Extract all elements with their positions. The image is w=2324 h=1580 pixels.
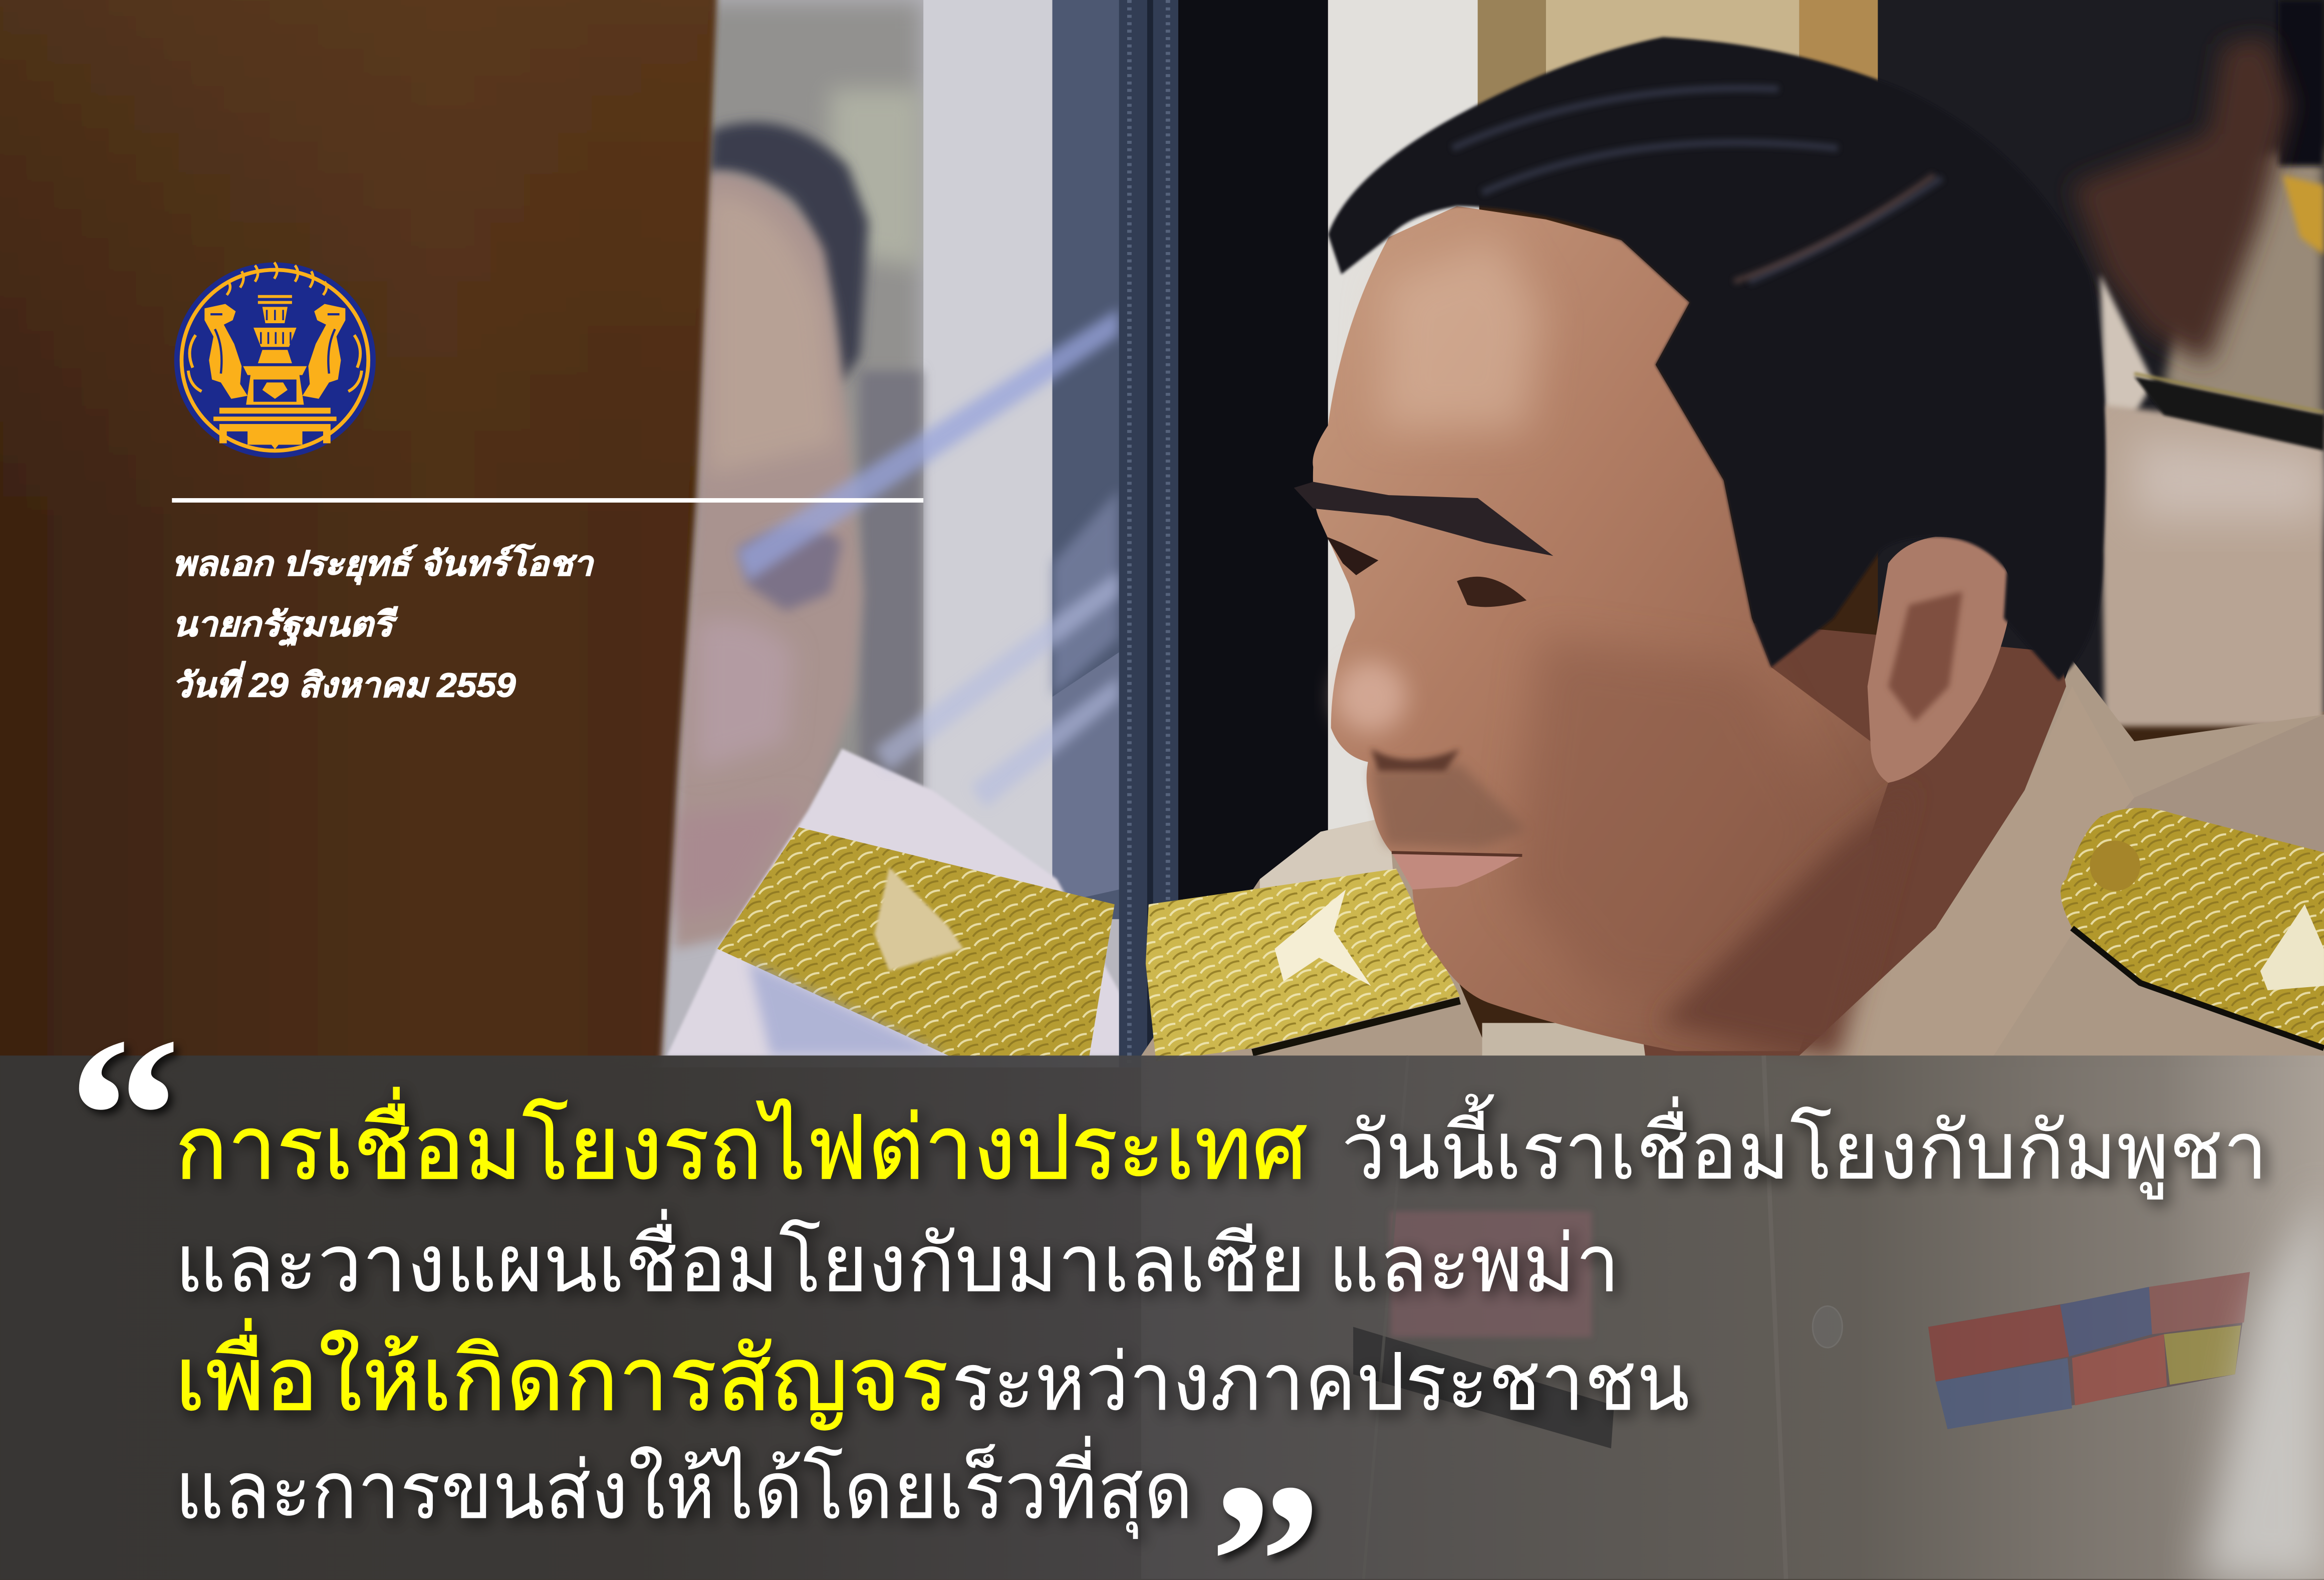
panel: background officer <box>2072 0 2324 727</box>
text: speaker credit <box>172 544 594 704</box>
divider line <box>172 498 923 503</box>
pink rank badge <box>1390 1211 1592 1337</box>
seal pedestal <box>213 366 337 421</box>
panel: window reflection <box>652 0 1141 1067</box>
face <box>1313 206 1888 1051</box>
text: “ <box>68 991 181 1241</box>
panel: brown curtain <box>0 0 717 1067</box>
reflected hair <box>708 122 869 385</box>
seal right guardian <box>303 304 345 399</box>
lips <box>1392 852 1522 889</box>
placket seam <box>1764 1055 1786 1579</box>
date: วันที่ 29 สิงหาคม 2559 <box>172 660 516 704</box>
hair <box>1328 37 2106 681</box>
shirt back <box>2100 405 2324 727</box>
icon: left epaulette <box>1146 869 1460 1061</box>
right eye <box>1457 577 1526 607</box>
seal flames <box>227 263 327 295</box>
icon: right epaulette <box>2060 808 2324 1048</box>
shoulder board <box>2282 175 2324 255</box>
panel: portrait head <box>1294 37 2106 1060</box>
speaker name: พลเอก ประยุทธ์ จันทร์โอชา <box>172 544 594 585</box>
neck <box>1616 623 2066 1055</box>
panel: uniform <box>1141 660 2324 1579</box>
icon: reflected epaulette <box>717 827 1115 1055</box>
forehead highlight <box>1378 237 1541 430</box>
seal left guardian <box>204 304 247 399</box>
dark background right <box>2278 0 2324 166</box>
name tag <box>1353 1327 1614 1448</box>
seal side flames <box>188 335 362 391</box>
hair sheen <box>1452 88 1942 282</box>
neck and ear <box>2072 37 2291 363</box>
ear <box>1868 537 2012 783</box>
stubble and nose shade <box>1371 764 1526 848</box>
line 3 highlight: เพื่อให้เกิดการสัญจร <box>175 1318 948 1431</box>
button <box>1813 1306 1842 1347</box>
seal base <box>219 424 331 445</box>
seal guardian markings <box>209 314 341 397</box>
quote text <box>175 1087 2268 1539</box>
ribbon bar <box>1928 1272 2250 1429</box>
dark strap <box>2134 376 2324 450</box>
icon: government seal <box>174 263 376 458</box>
jaw into neck shade <box>1660 786 1912 1060</box>
seal urn <box>253 295 297 363</box>
right light fade <box>2201 1186 2324 1579</box>
line 4 body: และการขนส่งให้ได้โดยเร็วที่สุด <box>175 1436 1193 1539</box>
uniform far shoulder <box>2164 148 2324 430</box>
panel: chest details under band <box>1353 1055 2324 1579</box>
nose highlight <box>1336 661 1407 732</box>
panel: dark quote band <box>0 1055 2324 1580</box>
line 1 body: วันนี้เราเชื่อมโยงกับกัมพูชา <box>1341 1093 2268 1200</box>
line 1 highlight: การเชื่อมโยงรถไฟต่างประเทศ <box>175 1087 1307 1198</box>
collar seam <box>1364 1055 1408 1579</box>
left eye <box>1327 537 1378 575</box>
panel: curtain behind <box>1478 0 2324 712</box>
reflected shoulder <box>667 749 1129 1055</box>
line 2 body: และวางแผนเชื่อมโยงกับมาเลเซีย และพม่า <box>175 1209 1620 1308</box>
eyebrow <box>1294 482 1554 556</box>
line 3 body: ระหว่างภาคประชาชน <box>951 1337 1690 1427</box>
cheek tone <box>1512 637 1838 1008</box>
reflection streaks <box>736 308 1119 581</box>
panel: window frame <box>1119 0 1479 1067</box>
white collar <box>2100 274 2154 415</box>
reflected face <box>674 172 863 949</box>
speaker title: นายกรัฐมนตรี <box>172 605 398 646</box>
